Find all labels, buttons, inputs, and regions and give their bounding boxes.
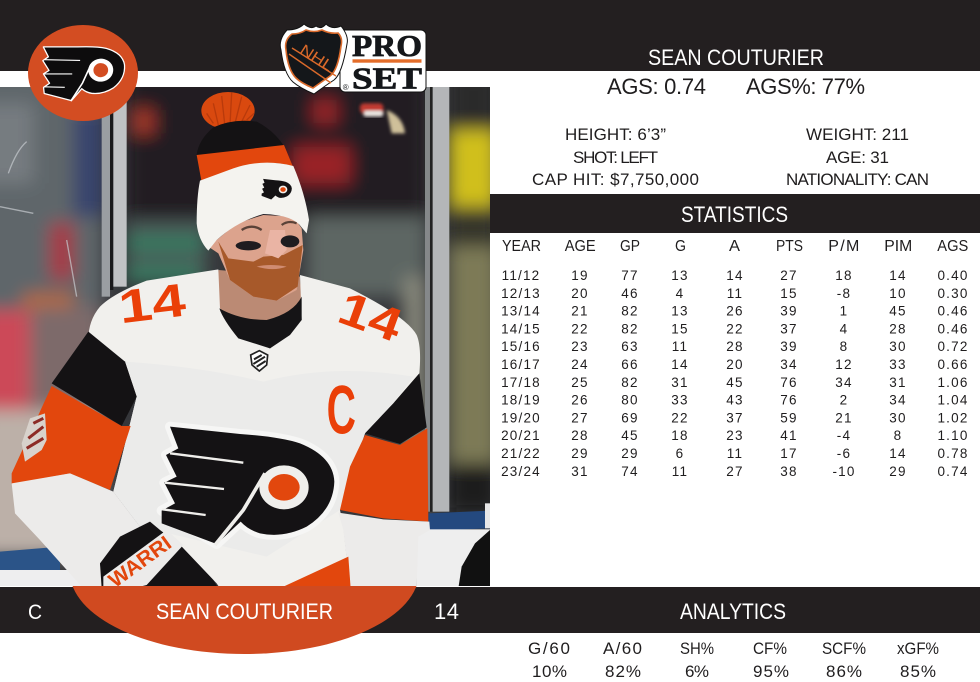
season 21/22: 6	[676, 446, 684, 461]
season 21/22: 29	[571, 446, 589, 461]
season 14/15: 14/15	[501, 321, 541, 336]
jersey yoke shading	[113, 362, 394, 532]
season 21/22: 0.78	[937, 446, 969, 461]
season 14/15	[501, 321, 969, 336]
position: C	[28, 601, 42, 624]
season 20/21	[501, 428, 969, 443]
season 12/13: 12/13	[501, 286, 541, 301]
player name heading: SEAN COUTURIER	[648, 45, 824, 70]
season 23/24: 0.74	[937, 464, 969, 479]
season 19/20: 59	[780, 410, 798, 425]
season 11/12: 0.40	[937, 268, 969, 283]
rink boards and ice	[0, 503, 490, 590]
table header: PTS	[776, 238, 803, 255]
season 23/24: 29	[889, 464, 907, 479]
undershirt	[219, 297, 302, 348]
season 20/21: 41	[780, 428, 798, 443]
rink glass and crowd background	[0, 70, 498, 590]
season 18/19: 80	[621, 393, 639, 408]
season 11/12: 11/12	[502, 268, 540, 283]
season 20/21: 1.10	[937, 428, 969, 443]
season 19/20	[501, 410, 969, 425]
analytics labels: CF%	[753, 639, 787, 658]
season 16/17: 33	[889, 357, 907, 372]
mouth	[257, 265, 287, 269]
season 23/24: 38	[780, 464, 798, 479]
beard	[218, 242, 303, 301]
season 16/17: 16/17	[501, 357, 541, 372]
season 19/20: 21	[835, 410, 853, 425]
jersey number: 14	[434, 599, 459, 624]
table header: GP	[620, 238, 640, 255]
season 14/15: 0.46	[937, 321, 969, 336]
season 14/15: 15	[671, 321, 689, 336]
season 12/13: 10	[889, 286, 907, 301]
glove	[100, 522, 218, 592]
analytics values: 85%	[900, 662, 936, 681]
NHL shield	[280, 24, 347, 94]
season 19/20: 69	[621, 410, 639, 425]
flyers logo	[39, 39, 128, 104]
season 13/14: 0.46	[937, 304, 969, 319]
season 18/19	[501, 393, 969, 408]
eye black left	[236, 241, 261, 250]
season 18/19: 76	[780, 393, 798, 408]
season 12/13: 46	[621, 286, 639, 301]
analytics labels	[528, 639, 939, 658]
season 14/15: 22	[726, 321, 744, 336]
season 20/21: 20/21	[501, 428, 541, 443]
shoulder number right: 14	[332, 281, 409, 352]
hat logo	[262, 179, 292, 199]
season 18/19: 33	[671, 393, 689, 408]
season 15/16	[501, 339, 969, 354]
season 19/20: 30	[889, 410, 907, 425]
season 14/15: 28	[889, 321, 907, 336]
season 12/13	[501, 286, 969, 301]
analytics heading: ANALYTICS	[680, 599, 786, 624]
SET wordmark: SET	[352, 60, 422, 96]
season 23/24: 74	[621, 464, 639, 479]
season 12/13: 11	[727, 286, 743, 301]
player bio right	[786, 125, 929, 189]
nose	[265, 230, 287, 258]
shoulder number left: 14	[116, 274, 188, 333]
analytics labels: SH%	[680, 639, 714, 658]
season 15/16: 39	[780, 339, 798, 354]
season 21/22: 21/22	[501, 446, 541, 461]
season 11/12: 18	[835, 268, 853, 283]
season 11/12: 77	[621, 268, 639, 283]
season 16/17: 12	[835, 357, 853, 372]
season 20/21: 23	[726, 428, 744, 443]
season 13/14	[501, 304, 969, 319]
season 15/16: 15/16	[501, 339, 541, 354]
statistics band	[490, 194, 980, 233]
player bio right: NATIONALITY: CAN	[786, 170, 929, 189]
season 14/15: 82	[621, 321, 639, 336]
season 20/21: 45	[621, 428, 639, 443]
season 18/19: 2	[840, 393, 848, 408]
analytics values: 95%	[753, 662, 789, 681]
season 19/20: 1.02	[937, 410, 969, 425]
season 18/19: 18/19	[501, 393, 541, 408]
season 13/14: 13	[671, 304, 689, 319]
season 15/16: 30	[889, 339, 907, 354]
season 15/16: 23	[571, 339, 589, 354]
season 17/18: 31	[889, 375, 907, 390]
analytics labels: SCF%	[822, 639, 866, 658]
season 13/14: 82	[621, 304, 639, 319]
season 12/13: 15	[780, 286, 798, 301]
season 21/22: 17	[780, 446, 798, 461]
table header: AGS	[937, 238, 968, 255]
season 20/21: 28	[571, 428, 589, 443]
analytics labels: A/60	[603, 639, 642, 658]
AGS percent: AGS%: 77%	[746, 74, 865, 99]
season 21/22: 11	[727, 446, 743, 461]
chest logo	[162, 427, 334, 545]
season 18/19: 34	[889, 393, 907, 408]
player bio left	[532, 125, 699, 189]
jersey body	[88, 269, 420, 588]
season 21/22: 29	[621, 446, 639, 461]
season 13/14: 39	[780, 304, 798, 319]
season 15/16: 63	[621, 339, 639, 354]
season 18/19: 1.04	[937, 393, 969, 408]
analytics values: 86%	[826, 662, 862, 681]
season 18/19: 43	[726, 393, 744, 408]
season 14/15: 4	[840, 321, 848, 336]
pro set plate	[340, 30, 426, 92]
table header	[502, 238, 968, 255]
player bio left: HEIGHT: 6’3”	[565, 125, 666, 144]
left sleeve	[12, 332, 140, 587]
season 17/18: 17/18	[501, 375, 541, 390]
name plate arc	[72, 586, 416, 654]
season 19/20: 19/20	[501, 410, 541, 425]
season 20/21: -4	[837, 428, 851, 443]
player bio left: CAP HIT: $7,750,000	[532, 170, 699, 189]
analytics labels: xGF%	[897, 639, 939, 658]
player bio right: AGE: 31	[826, 148, 889, 167]
captain C: C	[327, 372, 356, 448]
analytics values: 82%	[605, 662, 641, 681]
statistics heading: STATISTICS	[681, 202, 788, 227]
season 21/22	[501, 446, 969, 461]
AGS score: AGS: 0.74	[607, 74, 706, 99]
table header: A	[729, 238, 740, 255]
season 15/16: 0.72	[937, 339, 969, 354]
neck	[218, 270, 301, 320]
season 18/19: 26	[571, 393, 589, 408]
season 17/18: 82	[621, 375, 639, 390]
season 17/18: 34	[835, 375, 853, 390]
hat	[197, 121, 309, 251]
season 23/24	[501, 464, 969, 479]
season 15/16: 8	[840, 339, 848, 354]
season 16/17: 34	[780, 357, 798, 372]
season 20/21: 18	[671, 428, 689, 443]
season 13/14: 21	[571, 304, 589, 319]
white area right of photo	[490, 71, 980, 194]
PRO wordmark: PRO	[352, 28, 422, 63]
jersey hem	[283, 557, 351, 588]
hat pompom	[201, 92, 255, 129]
season 11/12: 13	[671, 268, 689, 283]
season 12/13: 0.30	[937, 286, 969, 301]
season 19/20: 27	[571, 410, 589, 425]
season 11/12: 27	[780, 268, 798, 283]
season 12/13: 4	[676, 286, 684, 301]
registered mark: ®	[343, 83, 349, 92]
season 13/14: 26	[726, 304, 744, 319]
season 23/24: 27	[726, 464, 744, 479]
eyes	[242, 222, 297, 230]
season 16/17: 20	[726, 357, 744, 372]
NHL crest on jersey	[251, 351, 268, 371]
face	[208, 215, 303, 301]
analytics labels: G/60	[528, 639, 570, 658]
bottom band	[0, 587, 980, 633]
analytics values	[532, 662, 936, 681]
table header: G	[675, 238, 686, 255]
season 13/14: 13/14	[501, 304, 541, 319]
table header: YEAR	[502, 238, 541, 255]
season 17/18: 1.06	[937, 375, 969, 390]
season 16/17	[501, 357, 969, 372]
season 15/16: 28	[726, 339, 744, 354]
right sleeve	[338, 373, 430, 588]
header band	[0, 0, 980, 71]
player photo	[0, 70, 498, 592]
season 17/18: 45	[726, 375, 744, 390]
season 14/15: 37	[780, 321, 798, 336]
season 16/17: 14	[671, 357, 689, 372]
season 11/12: 19	[571, 268, 589, 283]
table header: PIM	[884, 238, 912, 255]
name plate text: SEAN COUTURIER	[156, 599, 333, 624]
season 23/24: -10	[832, 464, 856, 479]
season 16/17: 24	[571, 357, 589, 372]
season 19/20: 37	[726, 410, 744, 425]
season 23/24: 31	[571, 464, 589, 479]
season 11/12	[502, 268, 969, 283]
season 16/17: 0.66	[937, 357, 969, 372]
season 21/22: -6	[837, 446, 851, 461]
season 14/15: 22	[571, 321, 589, 336]
eye black right	[281, 235, 299, 247]
season 17/18: 25	[571, 375, 589, 390]
season 11/12: 14	[726, 268, 744, 283]
season 12/13: 20	[571, 286, 589, 301]
glove: WARRI	[104, 532, 176, 592]
table header: P/M	[828, 238, 859, 255]
table header: AGE	[565, 238, 596, 255]
season 20/21: 8	[894, 428, 902, 443]
NHL shield: NHL	[297, 41, 336, 75]
season 17/18	[501, 375, 969, 390]
season 11/12: 14	[889, 268, 907, 283]
season 13/14: 45	[889, 304, 907, 319]
statistics table	[501, 238, 969, 479]
season 23/24: 23/24	[501, 464, 541, 479]
NHL Pro Set logo	[280, 24, 426, 96]
glass support posts	[102, 83, 449, 512]
team logo circle	[28, 25, 138, 121]
season 15/16: 11	[672, 339, 688, 354]
player bio right: WEIGHT: 211	[806, 125, 909, 144]
player bio left: SHOT: LEFT	[573, 148, 658, 167]
season 13/14: 1	[840, 304, 848, 319]
season 12/13: -8	[837, 286, 851, 301]
analytics values: 6%	[685, 662, 709, 681]
season 17/18: 31	[671, 375, 689, 390]
orange rule	[352, 59, 422, 63]
season 19/20: 22	[671, 410, 689, 425]
season 23/24: 11	[672, 464, 688, 479]
season 17/18: 76	[780, 375, 798, 390]
season 16/17: 66	[621, 357, 639, 372]
season 21/22: 14	[889, 446, 907, 461]
analytics values: 10%	[532, 662, 567, 681]
